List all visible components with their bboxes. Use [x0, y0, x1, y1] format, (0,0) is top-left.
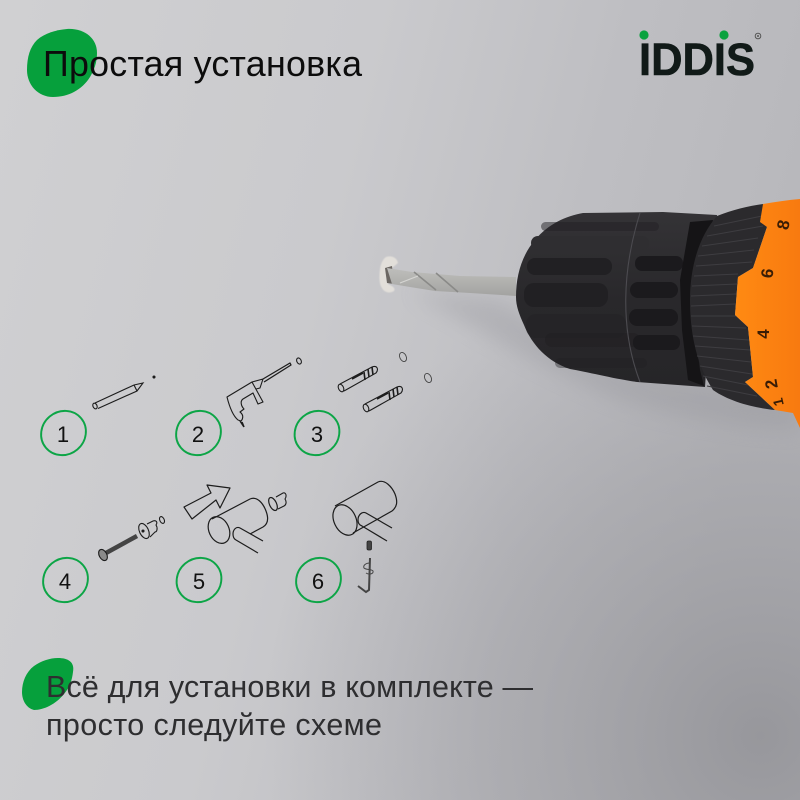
dial numbers: 6: [757, 267, 778, 279]
step 4 number: [34, 549, 97, 611]
dial numbers: 1: [769, 396, 787, 408]
title: Простая установка: [43, 44, 362, 84]
step 1 number: 1: [57, 422, 69, 447]
knurled collar: [690, 204, 775, 410]
step 2 icon: hammer drill: [227, 357, 302, 427]
caption: просто следуйте схеме: [46, 708, 382, 742]
step 5 icon: holder cylinder with rod and cap: [204, 493, 286, 553]
step 6 number: 6: [312, 569, 324, 594]
step 2 number: 2: [192, 422, 204, 447]
dial numbers: [754, 218, 794, 408]
caption: Всё для установки в комплекте —: [46, 670, 534, 704]
drill shadow on wall: [410, 292, 800, 430]
step 4 number: 4: [59, 569, 71, 594]
step 1 icon: pencil and mark: [92, 376, 155, 410]
green blob behind caption: [22, 658, 73, 710]
step 5 icon: direction arrow: [184, 485, 230, 519]
chuck rear ribs: [629, 256, 683, 350]
chuck nose ribs: [524, 222, 659, 368]
step 6 number: [287, 549, 350, 611]
step 3 number: 3: [311, 422, 323, 447]
logo: IDDIS: IDDIS: [639, 34, 755, 85]
step 3 icon: wall plugs and holes: [337, 351, 433, 413]
step 3 number: [286, 402, 348, 464]
step 5 number: 5: [193, 569, 205, 594]
green blob behind title: [27, 29, 97, 97]
dial numbers: 4: [754, 329, 773, 339]
caption: [46, 670, 534, 742]
step 1 number: [32, 402, 95, 464]
dial numbers: 8: [773, 218, 794, 231]
drilled hole with plaster crumbs: [379, 256, 398, 292]
step 5 number: [168, 549, 230, 611]
orange drill body: [735, 199, 800, 428]
drill chuck: [516, 212, 717, 387]
step 6 icon: holder, set screw and hex key: [328, 481, 397, 592]
drill bit: [387, 268, 516, 296]
dial numbers: 2: [761, 378, 782, 390]
step 4 icon: screw and cap: [97, 516, 166, 562]
step 2 number: [167, 402, 230, 464]
